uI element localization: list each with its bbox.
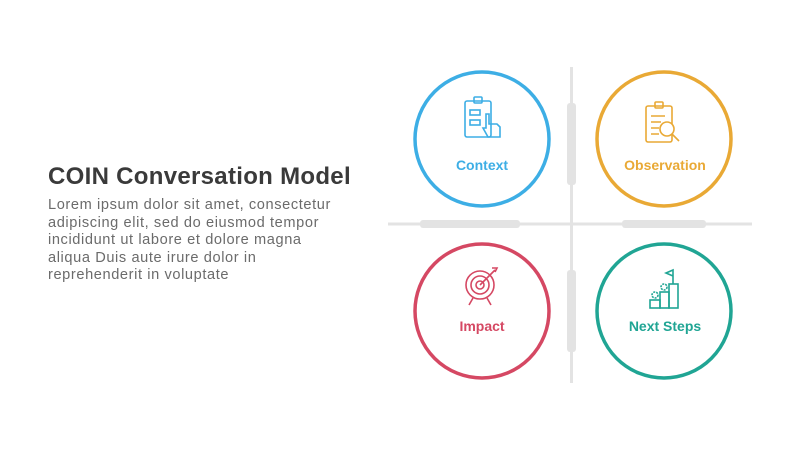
icon: target: [466, 268, 497, 305]
label: Next Steps: Next Steps: [629, 318, 701, 334]
panel: Next Steps: [597, 244, 731, 378]
text block: description: incididunt ut labore et dolore magna: [48, 232, 302, 248]
icon: clipboard hand: [465, 97, 500, 137]
title: COIN Conversation Model: [48, 163, 351, 190]
label: Observation: Observation: [624, 157, 706, 173]
icon: clipboard magnifier: [646, 102, 679, 142]
text block: description: [48, 197, 331, 283]
label: Impact: Impact: [459, 318, 505, 334]
panel: Context: [415, 72, 549, 206]
text block: description: adipiscing elit, sed do eiusmod tempor: [48, 215, 319, 231]
panel: Impact: [415, 244, 549, 378]
panel: Observation: [597, 72, 731, 206]
label: Context: Context: [456, 157, 508, 173]
text block: description: reprehenderit in voluptate: [48, 267, 229, 283]
text block: description: aliqua Duis aute irure dolor in: [48, 250, 256, 266]
text block: description: Lorem ipsum dolor sit amet, consectetur: [48, 197, 331, 213]
icon: steps flag: [650, 270, 678, 308]
